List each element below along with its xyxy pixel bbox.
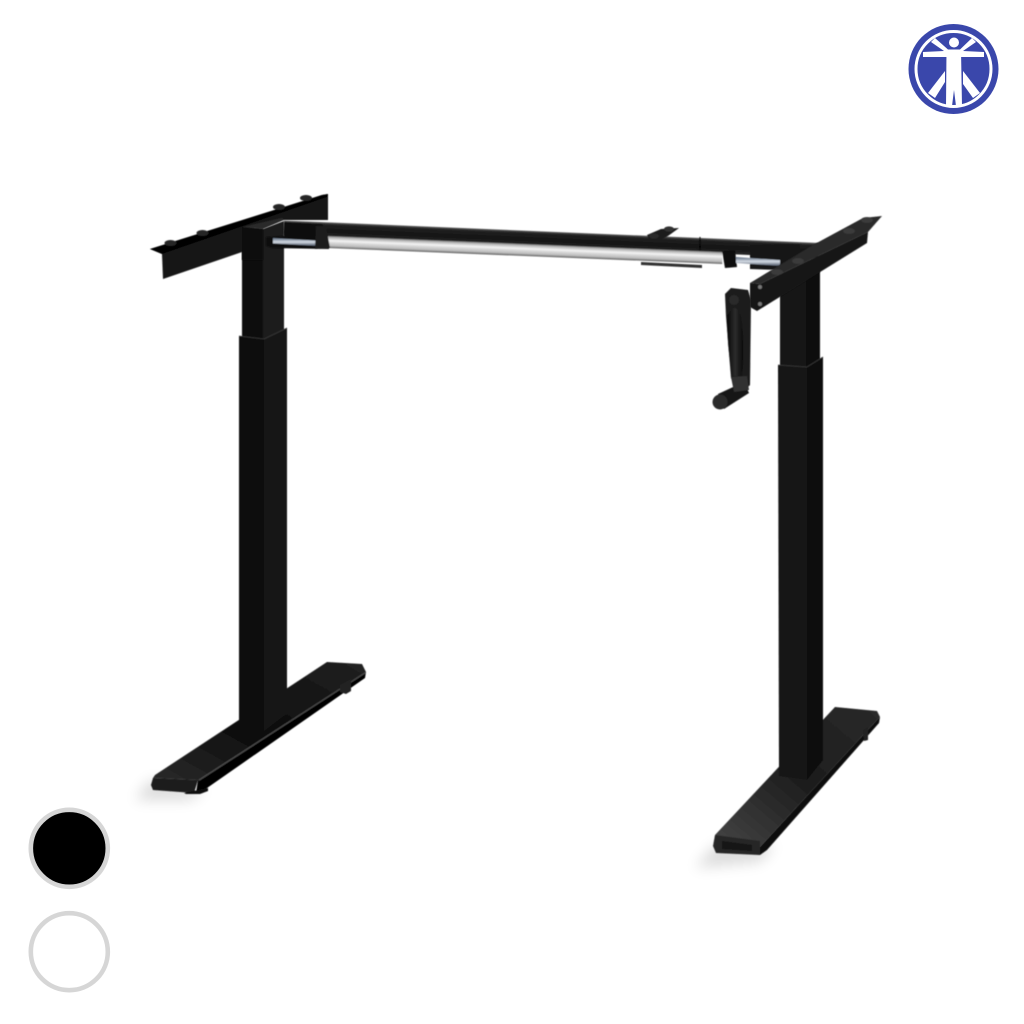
- icon: ergonomic vitruvian logo: [908, 24, 998, 114]
- crank grip: [727, 308, 743, 376]
- left upper column: [242, 221, 284, 345]
- bracket bolts: [771, 217, 873, 275]
- chrome tube: [327, 236, 723, 264]
- crank arm: [725, 288, 751, 395]
- left mounting bracket: [150, 194, 328, 279]
- left foot: [151, 662, 366, 794]
- centre bracket: [647, 226, 679, 240]
- desk frame: floor shadows: [135, 780, 775, 868]
- swatch: black colour option: [31, 810, 108, 887]
- swatch: white colour option: [31, 913, 108, 990]
- right foot: [713, 707, 880, 855]
- crank knob: [718, 382, 749, 409]
- left lower column: [239, 328, 287, 731]
- left gearbox: [266, 222, 330, 249]
- left column over bracket: [242, 227, 263, 260]
- slider plate under tube: [641, 262, 702, 268]
- bracket bolts: [164, 195, 312, 246]
- black crossbar: [283, 220, 819, 258]
- right gearbox: [722, 244, 800, 270]
- right upper column: [780, 268, 820, 372]
- right mounting bracket: [750, 216, 882, 311]
- left leg: [151, 221, 366, 794]
- right leg: [713, 268, 880, 855]
- crossbar and drive tube: [266, 220, 819, 270]
- right lower column: [778, 357, 823, 780]
- hand crank: [712, 288, 751, 410]
